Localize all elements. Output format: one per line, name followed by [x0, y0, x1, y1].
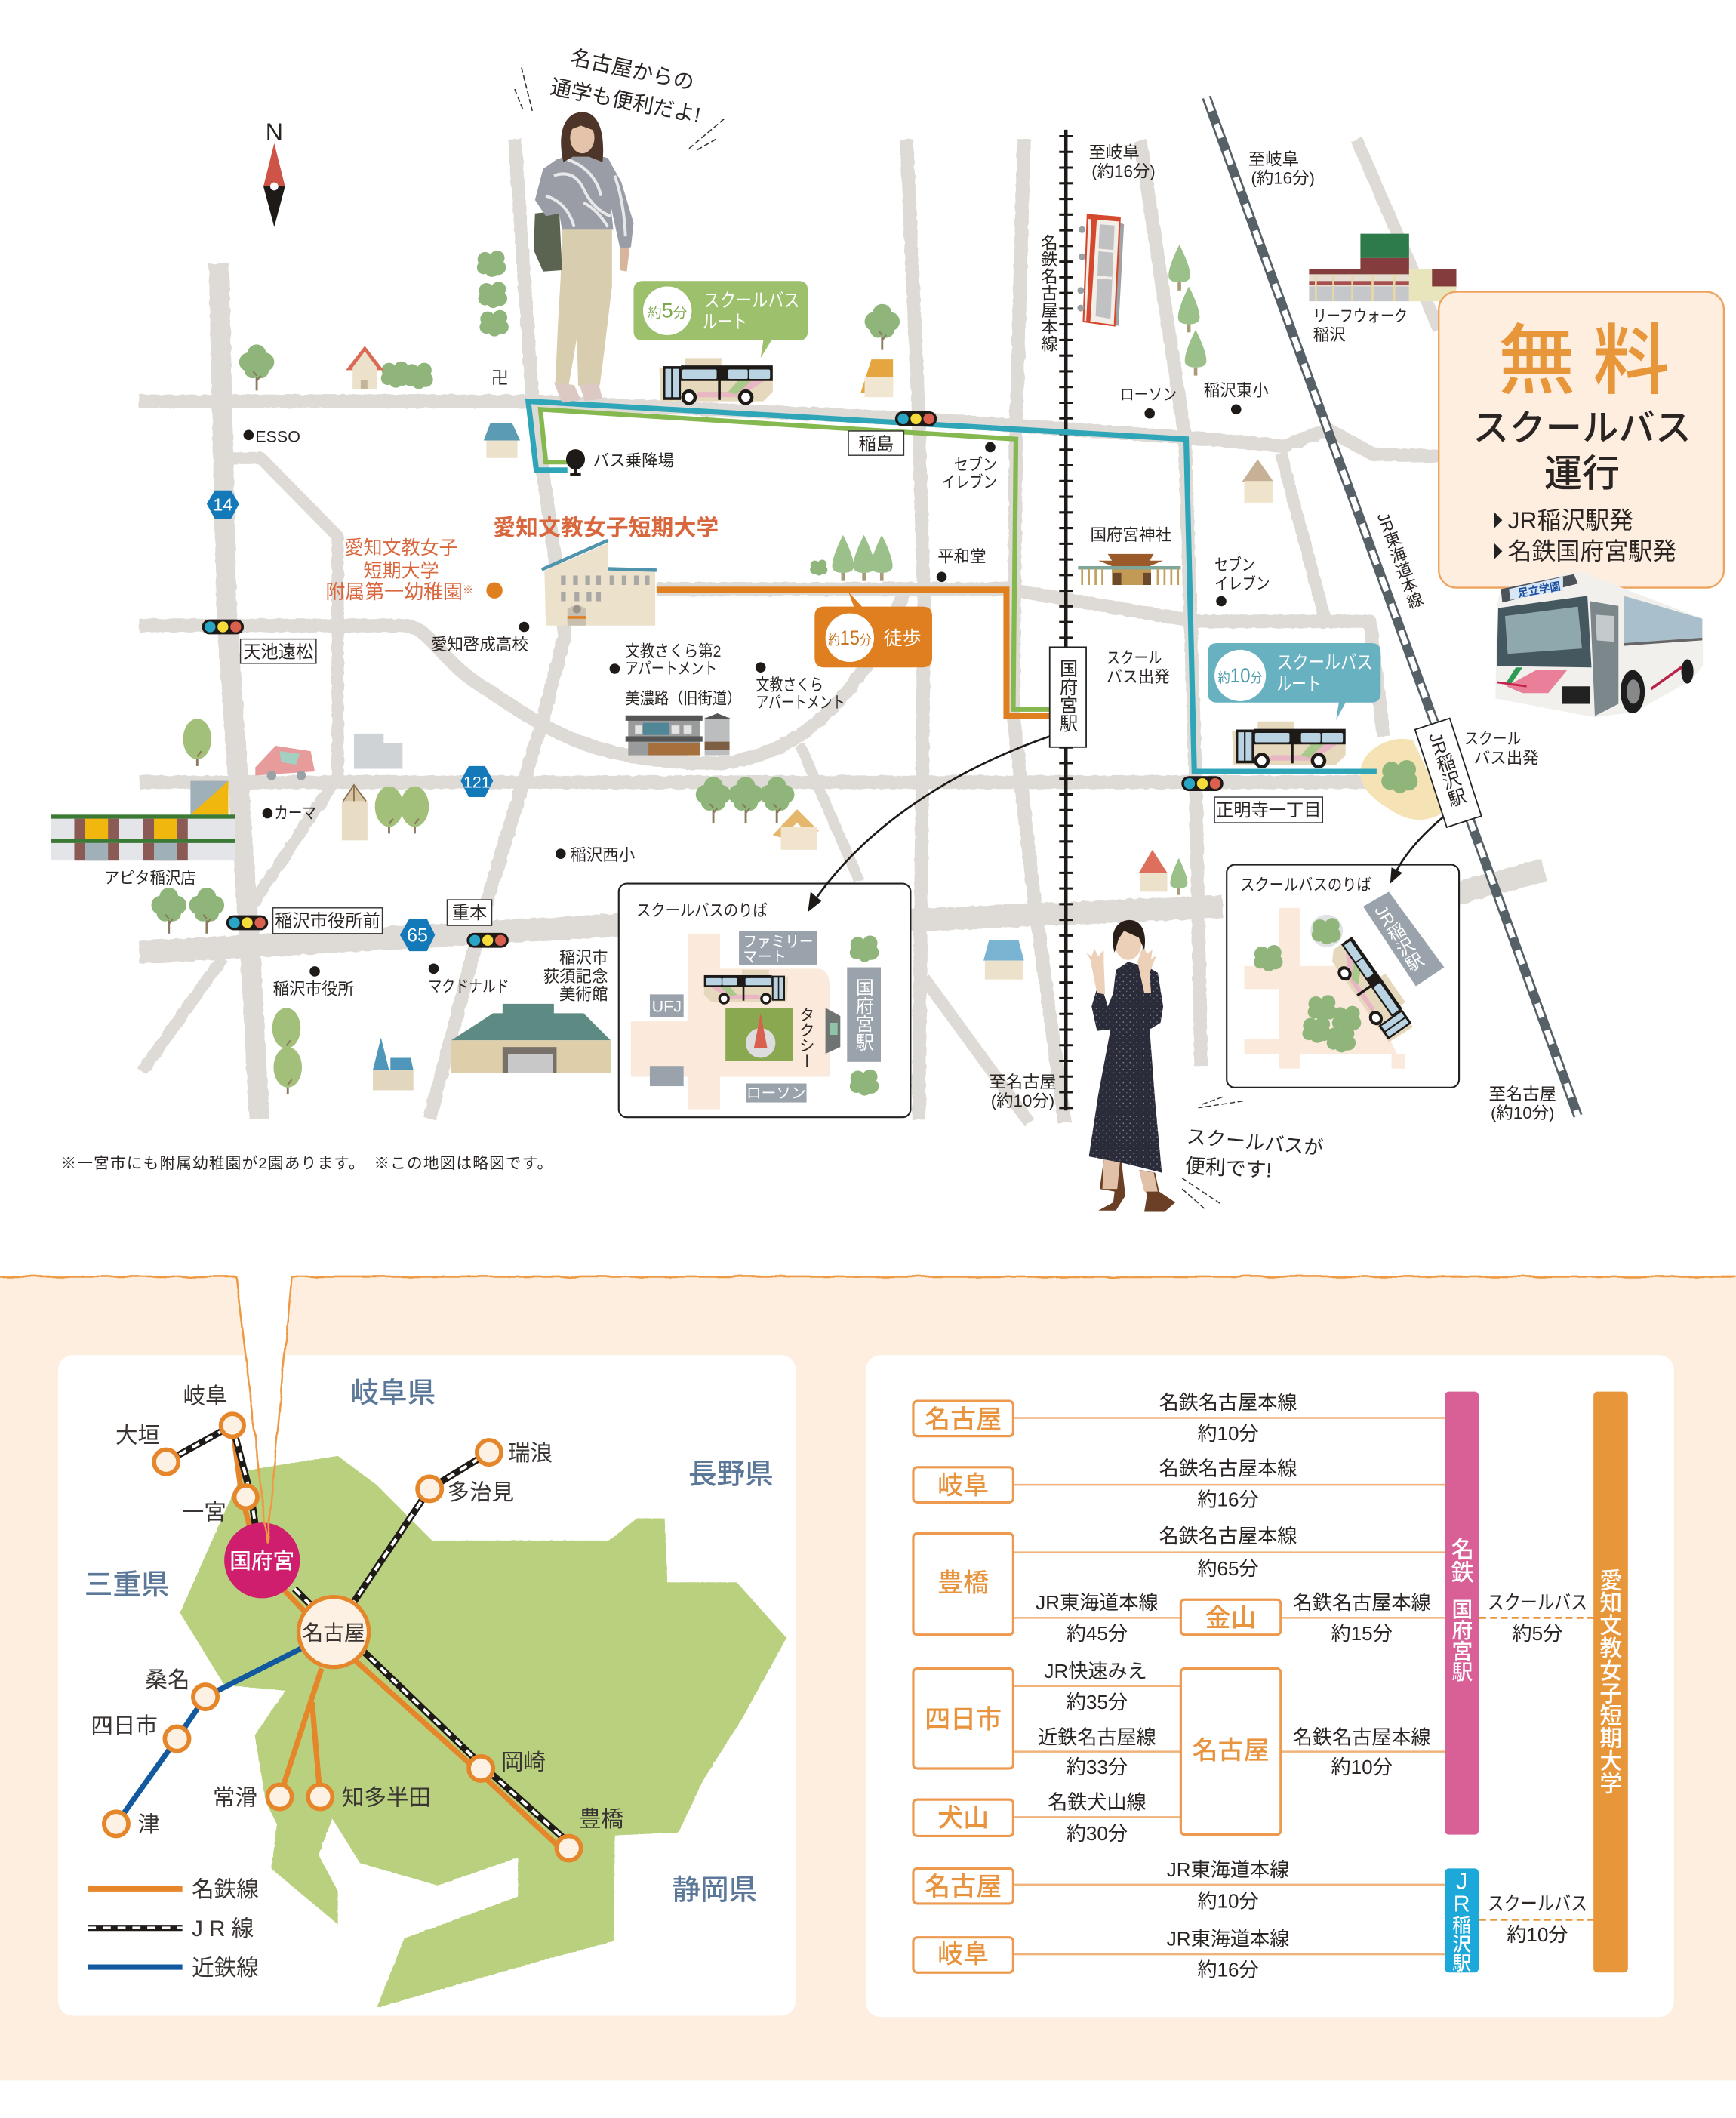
labels: west side of map: 稲沢市役所: [273, 980, 354, 998]
speech bubble: 5 minute bus route: スクールバス: [704, 290, 800, 311]
line and time labels: 約33分: [1067, 1756, 1128, 1778]
intersection text: 天池遠松: [243, 642, 313, 662]
callout: free school bus: 名鉄国府宮駅発: [1508, 538, 1676, 565]
station labels: 一宮: [182, 1501, 226, 1525]
intersection labels: [241, 431, 1322, 934]
departure station names: 名古屋: [925, 1405, 1002, 1434]
labels: west side of map: 愛知啓成高校: [431, 636, 528, 654]
line and time labels: 約10分: [1197, 1422, 1259, 1445]
inset: Konomiya school bus stop: ファミリー: [743, 934, 814, 951]
label: kindergarten: 附属第一幼稚園: [325, 582, 463, 603]
line and time labels: 約30分: [1067, 1822, 1128, 1845]
inset: Konomiya school bus stop: ローソン: [746, 1085, 806, 1102]
labels: east side of map: スクール: [1107, 649, 1162, 667]
houses: [255, 346, 1274, 1090]
speech bubble: 5 minute bus route: ルート: [703, 312, 747, 333]
labels: west side of map: 稲沢西小: [570, 846, 635, 864]
intersection text: 正明寺一丁目: [1216, 800, 1321, 820]
icon: temple mark: 卍: [491, 368, 509, 387]
labels: east side of map: 至岐阜: [1248, 149, 1299, 168]
labels: east side of map: (約16分): [1091, 162, 1156, 180]
compass: N: [266, 119, 283, 146]
speech bubble: 15 minute walk: 約15分: [828, 626, 872, 649]
departure station names: 金山: [1205, 1604, 1257, 1633]
arrow: Konomiya station to inset: [808, 736, 1050, 912]
yellow plaza at JR Inazawa station: [1360, 739, 1445, 820]
line and time labels: スクールバス: [1488, 1892, 1587, 1915]
labels: west side of map: 荻須記念: [543, 968, 608, 986]
station labels: [91, 1384, 623, 1837]
line and time labels: 名鉄名古屋本線: [1159, 1458, 1297, 1480]
bar: JR Inazawa station: J: [1456, 1868, 1467, 1894]
line and time labels: 約16分: [1197, 1488, 1259, 1511]
line and time labels: 名鉄名古屋本線: [1159, 1391, 1297, 1414]
labels: east side of map: 稲沢: [1313, 326, 1346, 344]
labels: west side of map: バス乗降場: [593, 452, 674, 470]
station sign: JR Inazawa: [1415, 719, 1482, 827]
speech bubble: 5 minute bus route: 約5分: [648, 300, 687, 322]
line and time labels: JR東海道本線: [1167, 1927, 1289, 1950]
callout: free school bus: [1439, 292, 1724, 588]
line and time labels: JR東海道本線: [1167, 1858, 1289, 1881]
line and time labels: [1036, 1391, 1587, 1981]
labels: east side of map: [937, 143, 1556, 1122]
bus route: teal 10 minutes: [528, 402, 1377, 771]
photo: student in navy dress: [1086, 920, 1175, 1212]
legend: [88, 1877, 259, 1981]
panel: regional rail map: [58, 1355, 796, 2016]
icon: kindergarten marker: [486, 582, 503, 599]
line and time labels: 約10分: [1197, 1889, 1259, 1912]
inset: Konomiya school bus stop: [619, 884, 910, 1117]
labels: east side of map: 名鉄名古屋本線: [1039, 233, 1058, 352]
line and time labels: 約16分: [1197, 1959, 1259, 1981]
lower section background: [0, 1276, 1736, 2080]
route number 65: [400, 919, 435, 951]
building: Konomiya shrine: [1078, 554, 1180, 585]
station labels: 津: [138, 1812, 160, 1837]
route number 121: 121: [463, 774, 491, 792]
callout: free school bus: 料: [1593, 319, 1670, 405]
labels: east side of map: スクール: [1464, 730, 1521, 748]
labels: west side of map: アパートメント: [625, 660, 717, 678]
inset: Konomiya school bus stop: UFJ: [652, 998, 682, 1016]
labels: east side of map: リーフウォーク: [1313, 307, 1408, 325]
legend: 名鉄線: [192, 1877, 259, 1902]
icon: bus stop: [566, 449, 585, 476]
speech: student one: [515, 45, 724, 150]
bus route: green 5 minutes: [540, 409, 1051, 710]
departure station names: [925, 1405, 1270, 1969]
labels: west side of map: ESSO: [255, 427, 300, 445]
intersection text: 稲沢市役所前: [275, 911, 380, 931]
labels: east side of map: JR東海道本線: [1374, 510, 1425, 611]
label: kindergarten: 愛知文教女子: [344, 537, 458, 559]
route number 65: 65: [407, 925, 428, 947]
connector lines: [1013, 1418, 1445, 1954]
speech bubble: 5 minute bus route: [633, 281, 808, 358]
labels: west side of map: アピタ稲沢店: [104, 870, 196, 888]
speech bubble: 10 minute bus route: スクールバス: [1276, 652, 1373, 673]
building: Aichi Bunkyo Women's College: [542, 540, 657, 626]
photo: school bus: [1495, 571, 1703, 717]
labels: east side of map: 至名古屋: [1488, 1085, 1556, 1104]
map points of interest: [244, 405, 1242, 977]
line and time labels: 約65分: [1197, 1557, 1259, 1580]
callout: free school bus: JR稲沢駅発: [1508, 507, 1633, 534]
roads: [139, 139, 1544, 1122]
labels: east side of map: 国府宮神社: [1090, 526, 1171, 544]
bar: JR Inazawa station: R: [1454, 1892, 1470, 1917]
labels: east side of map: 平和堂: [937, 548, 987, 566]
departure station names: 岐阜: [937, 1472, 989, 1501]
notch pointer from map: [0, 1276, 1736, 1543]
labels: west side of map: アパートメント: [756, 694, 845, 712]
inset: JR Inazawa school bus stop: スクールバスのりば: [1240, 876, 1371, 894]
bar: college: [1593, 1392, 1628, 1972]
station sign: Konomiya: [1050, 647, 1086, 747]
speech: student two: [1182, 1097, 1324, 1209]
bar: JR Inazawa station: 沢: [1452, 1935, 1471, 1956]
station sign: Konomiya: 国府宮駅: [1057, 659, 1078, 732]
station labels: 岡崎: [501, 1750, 546, 1775]
station labels: 大垣: [115, 1424, 160, 1448]
intersection text: 重本: [452, 903, 487, 922]
speech: student one: 通学も便利だよ!: [549, 75, 703, 127]
legend: J R 線: [192, 1916, 254, 1941]
railway: JR Tokaido main line: [1206, 97, 1578, 1116]
prefecture labels: 岐阜県: [350, 1377, 436, 1408]
station labels: 常滑: [213, 1785, 257, 1810]
bar: JR Inazawa station: 駅: [1452, 1953, 1471, 1975]
callout: free school bus: スクールバス: [1473, 408, 1691, 449]
callout: free school bus: 無: [1498, 319, 1575, 405]
prefecture labels: 静岡県: [672, 1874, 757, 1906]
Aichi prefecture shape: [180, 1456, 786, 2008]
inset: JR Inazawa school bus stop: JR稲沢駅: [1371, 901, 1427, 975]
dashed bus connectors: [1479, 1618, 1594, 1919]
line and time labels: 名鉄名古屋本線: [1293, 1591, 1431, 1614]
labels: west side of map: 美濃路（旧街道）: [625, 690, 741, 708]
footnote: ※一宮市にも附属幼稚園が2園あります。 ※この地図は略図です。: [61, 1155, 553, 1172]
bar: JR Inazawa station: 稲: [1452, 1916, 1471, 1937]
labels: west side of map: カーマ: [274, 805, 316, 823]
labels: west side of map: 文教さくら: [756, 676, 823, 694]
prefecture labels: 長野県: [688, 1458, 774, 1489]
label: kindergarten: [325, 537, 473, 603]
labels: east side of map: 至名古屋: [989, 1073, 1057, 1091]
speech: student two: スクールバスが: [1186, 1125, 1324, 1159]
hub: Konomiya: 国府宮: [229, 1550, 294, 1574]
speech: student one: 名古屋からの: [568, 45, 696, 94]
labels: east side of map: (約16分): [1251, 168, 1315, 187]
label: college name: 愛知文教女子短期大学: [493, 516, 719, 540]
photo: school bus: 足立学園: [1516, 579, 1562, 600]
Meitetsu lines: [232, 1425, 565, 1852]
speech bubble: 10 minute bus route: 約10分: [1218, 664, 1263, 687]
inset: JR Inazawa school bus stop: [1227, 865, 1459, 1088]
line and time labels: 名鉄名古屋本線: [1159, 1525, 1297, 1547]
station labels: 四日市: [91, 1713, 158, 1738]
labels: west side of map: 文教さくら第2: [625, 642, 721, 660]
traffic lights: [202, 411, 1224, 948]
labels: east side of map: セブン: [954, 456, 997, 474]
JR lines: [166, 1425, 569, 1842]
line and time labels: 約10分: [1507, 1923, 1568, 1946]
hub: Konomiya: [224, 1522, 300, 1598]
speech: student two: 便利です!: [1184, 1155, 1273, 1182]
labels: east side of map: バス出発: [1107, 668, 1170, 686]
speech bubble: 10 minute bus route: ルート: [1276, 674, 1322, 695]
bus on green route: [659, 358, 773, 403]
prefecture labels: 三重県: [85, 1568, 170, 1600]
bar: college: 愛知文教女子短期大学: [1596, 1568, 1622, 1794]
bus on teal route: [1232, 722, 1346, 767]
walking route: orange: [657, 590, 1051, 716]
line and time labels: 名鉄犬山線: [1048, 1791, 1147, 1814]
line and time labels: 約45分: [1067, 1622, 1128, 1645]
inset: Konomiya school bus stop: 国府宮駅: [852, 978, 873, 1051]
bar: Meitetsu Konomiya station: 名鉄: [1448, 1538, 1474, 1584]
labels: east side of map: イレブン: [1214, 574, 1270, 593]
compass: [263, 119, 285, 227]
departure station names: 豊橋: [937, 1568, 989, 1597]
inset: Konomiya school bus stop: タクシー: [796, 1006, 814, 1069]
bar: JR Inazawa station: [1445, 1868, 1479, 1975]
inset: Konomiya school bus stop: スクールバスのりば: [636, 902, 768, 920]
departure station names: 名古屋: [1193, 1736, 1270, 1765]
speech bubble: 10 minute bus route: [1208, 643, 1380, 720]
labels: east side of map: 稲沢東小: [1204, 381, 1269, 399]
line and time labels: 約5分: [1512, 1622, 1562, 1645]
building: Ogisu memorial art museum: [451, 1004, 611, 1073]
label: kindergarten: ※: [463, 584, 473, 596]
labels: east side of map: セブン: [1214, 556, 1255, 574]
trees and shrubs: [151, 245, 1206, 1094]
label: kindergarten: 短期大学: [364, 560, 439, 581]
panel: travel time diagram: [866, 1355, 1674, 2017]
line and time labels: JR快速みえ: [1044, 1660, 1147, 1682]
departure station names: 岐阜: [937, 1941, 989, 1969]
station labels: 桑名: [145, 1668, 189, 1693]
labels: east side of map: 至岐阜: [1089, 143, 1140, 162]
speech bubble: 15 minute walk: [814, 592, 932, 667]
map: Inazawa area: [51, 45, 1724, 1212]
building: Leaf Walk Inazawa: [1309, 234, 1456, 301]
building: Minoji old townhouse: [626, 713, 731, 756]
intersection text: 稲島: [858, 434, 894, 454]
route number 14: 14: [213, 495, 232, 515]
building: tower block: [1077, 215, 1124, 325]
station sign: JR Inazawa: JR稲沢駅: [1424, 730, 1468, 810]
line and time labels: JR東海道本線: [1036, 1591, 1159, 1614]
hub: Nagoya: 名古屋: [302, 1621, 365, 1645]
speech bubble: 15 minute walk: 徒歩: [884, 628, 922, 649]
departure station names: 四日市: [925, 1705, 1002, 1734]
labels: west side of map: [104, 427, 845, 1004]
departure station names: 犬山: [937, 1804, 989, 1833]
stations: [104, 1414, 581, 1861]
inset: Konomiya school bus stop: マート: [743, 948, 786, 965]
bar: Meitetsu Konomiya station: 国府宮駅: [1448, 1598, 1473, 1682]
line and time labels: 約15分: [1331, 1622, 1393, 1645]
photo: student with bag: [534, 112, 633, 402]
prefecture labels: [85, 1377, 774, 1906]
hub: Nagoya: [299, 1597, 369, 1667]
tree at JR Inazawa plaza: [1381, 760, 1417, 793]
bar: Meitetsu Konomiya station: [1445, 1392, 1479, 1835]
departure station names: 名古屋: [925, 1873, 1002, 1901]
labels: east side of map: イレブン: [942, 473, 997, 491]
labels: east side of map: (約10分): [991, 1091, 1054, 1110]
intersection text: [243, 434, 1321, 931]
labels: west side of map: 稲沢市: [559, 949, 608, 967]
station labels: 多治見: [447, 1480, 514, 1505]
labels: east side of map: (約10分): [1491, 1104, 1554, 1122]
labels: east side of map: ローソン: [1120, 386, 1177, 404]
station labels: 豊橋: [579, 1807, 623, 1832]
line and time labels: 約10分: [1331, 1756, 1393, 1778]
line and time labels: 近鉄名古屋線: [1038, 1726, 1156, 1749]
station labels: 知多半田: [342, 1785, 431, 1810]
building: Apita Inazawa store: [51, 781, 235, 860]
arrow: JR Inazawa station to inset: [1390, 817, 1443, 884]
labels: west side of map: マクドナルド: [428, 977, 509, 996]
labels: west side of map: 美術館: [559, 986, 608, 1004]
route number 14: [207, 491, 239, 519]
line and time labels: 名鉄名古屋本線: [1293, 1726, 1431, 1749]
labels: east side of map: バス出発: [1474, 749, 1539, 767]
station labels: 瑞浪: [508, 1441, 553, 1466]
line and time labels: スクールバス: [1488, 1591, 1587, 1614]
station labels: 岐阜: [183, 1384, 228, 1409]
railway: Meitetsu Nagoya main line: [1065, 130, 1067, 1110]
callout: free school bus: 運行: [1544, 452, 1620, 494]
legend: 近鉄線: [192, 1956, 259, 1981]
departure station boxes: [913, 1401, 1281, 1972]
line and time labels: 約35分: [1067, 1691, 1128, 1713]
route number 121: [460, 766, 493, 797]
Kintetsu line: [116, 1632, 334, 1824]
